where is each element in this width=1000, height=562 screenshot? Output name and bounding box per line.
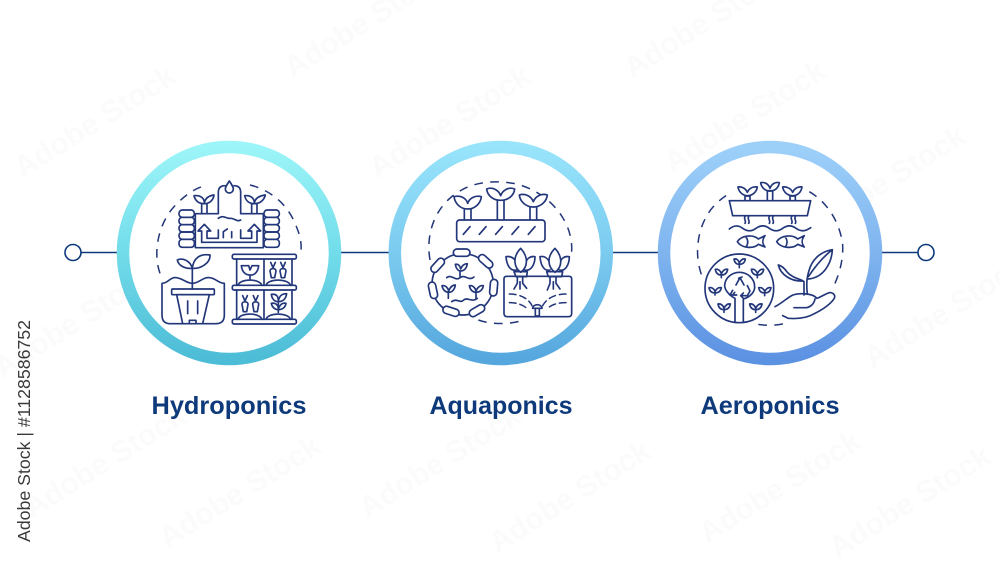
text: Adobe Stock: [798, 119, 972, 245]
ring: aquaponics: [395, 147, 607, 359]
panel: hydroponics: [123, 147, 335, 359]
text: Adobe Stock: [153, 429, 327, 555]
connector line: timeline: [65, 244, 934, 260]
heading: aeroponics: Aeroponics: [700, 392, 840, 420]
icon: aeroponics: [698, 182, 843, 325]
text: Adobe Stock: [483, 434, 657, 560]
heading: hydroponics: Hydroponics: [152, 392, 306, 420]
panel: aquaponics: [395, 147, 607, 359]
text: Adobe Stock: [353, 399, 527, 525]
icon: hydroponics: [157, 181, 301, 324]
text: Adobe Stock: [18, 399, 192, 525]
text: Adobe Stock: [693, 424, 867, 550]
heading: aquaponics: Aquaponics: [430, 392, 572, 420]
icon: aquaponics: [428, 182, 572, 324]
text: Adobe Stock: [823, 439, 997, 562]
ring: hydroponics: [123, 147, 335, 359]
text: Adobe Stock: [8, 59, 182, 185]
watermark credit: Adobe Stock | #1128586752: [14, 320, 34, 542]
text: Adobe Stock: [658, 54, 832, 180]
ring: aeroponics: [664, 147, 876, 359]
panel: aeroponics: [664, 147, 876, 359]
text: Adobe Stock: [363, 59, 537, 185]
